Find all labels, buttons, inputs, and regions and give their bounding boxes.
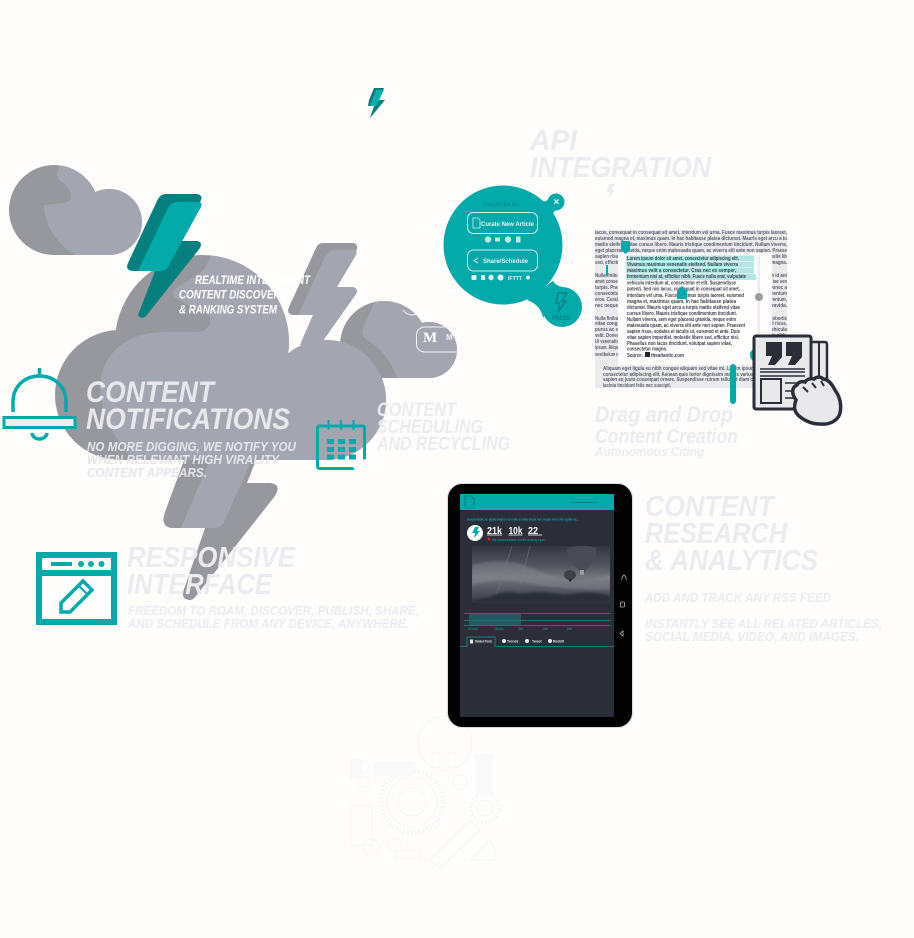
panel: article document: amet consequat nunc tempor quis. Aenean quis tortor dignissim mauris varius vestibulum tae sen	[595, 279, 787, 285]
article text: Phasellus non lacus tincidunt, volutpat sapien vitae,	[627, 341, 732, 347]
text: notifications description	[87, 439, 297, 480]
panel: article document: consectetur adipiscing elit. Aenean quis tortor dignissim mauris varius vestibulum nec	[603, 372, 787, 378]
article title: Suspendisse ac ligula magna non odio a nulla! Aqua non neque non tellus quam ac...	[467, 516, 579, 522]
destination icons row	[472, 274, 530, 282]
text: drag and drop: Content Creation	[595, 426, 738, 448]
article text: magna et, maximus quam. In hac habitasse platea	[627, 299, 736, 305]
timeline chart	[464, 613, 611, 631]
android buttons	[620, 575, 626, 636]
article photo	[472, 546, 610, 603]
heading: content scheduling	[376, 400, 510, 455]
icon: browser with pencil	[39, 555, 114, 622]
heading: content research: CONTENT	[645, 491, 776, 523]
text: drag and drop	[594, 402, 738, 459]
icon: bell	[4, 368, 75, 439]
article text: vitae sapien imperdiet, molestie libero sed, efficitur nisl.	[627, 335, 739, 341]
button: share schedule: Share/Schedule	[483, 258, 528, 265]
heading: responsive interface	[127, 542, 296, 601]
panel: article document: mattis eleifend vitae cursus libero. Mauris tristique condimentum tincidunt. Nullam viverra,	[595, 242, 787, 248]
text: notifications description: CONTENT APPEARS.	[87, 465, 207, 480]
heading: API integration: INTEGRATION	[530, 152, 712, 184]
article text: interdum vel urna. Fusce maximus turpis laoreet, euismod	[627, 293, 744, 299]
panel: article document: nec neque tristique, at pretium nisl sagittis. Integer a turpis ut metus tincidunt gravida.	[595, 303, 787, 309]
article text: malesuada quam, ac viverra elit ante non sapien. Praesent	[627, 323, 745, 329]
heading: API integration	[529, 125, 712, 184]
gears line art watermark	[351, 716, 499, 868]
icon: faint bolt	[607, 184, 615, 198]
text: realtime discovery: CONTENT DISCOVERY	[179, 290, 288, 302]
timeline chart: 4hr	[543, 627, 549, 631]
text: notifications description: WHEN RELEVANT HIGH VIRALITY	[87, 452, 280, 467]
white article card	[618, 253, 772, 365]
article text: Lorem ipsum dolor sit amet, consectetur adipiscing elit.	[627, 256, 739, 262]
article text: consectetur magna.	[627, 346, 667, 352]
heading: content notifications	[86, 376, 290, 436]
panel: article document: euismod magna et, maximus quam. In hac habitasse platea dictumst. Mauris eget arcu a tu	[595, 236, 787, 242]
panel: article document: ipsum. Aliquam erat volutpat, sed vitae urna mollis, rhoncus tortor eu, in hac platea.	[595, 345, 750, 351]
article text	[627, 256, 746, 359]
heading: API integration: API	[529, 125, 578, 157]
text: responsive description: AND SCHEDULE FROM ANY DEVICE, ANYWHERE.	[127, 616, 409, 631]
article text: Vivamus maximus venenatis eleifend. Nullam viverra	[627, 262, 738, 268]
tabs: Reddit	[553, 640, 565, 644]
panel: article document: sapien eu justo consequat ornare. Suspendisse rutrum tellus et diam congue, in varius	[603, 377, 787, 383]
panel: article document: consectetur arcu sed ultrices nulla. Suspendisse potenti, nam in dolor at elit condimentum	[595, 291, 787, 297]
text: research description: SOCIAL MEDIA, VIDEO, AND IMAGES.	[645, 629, 859, 644]
button: share schedule	[468, 250, 538, 271]
icon: M badge: M	[446, 333, 453, 342]
highlighted text	[626, 256, 756, 280]
panel: article document: sapien risus, sodales et iaculis ut, euismod et ante. Duis vitae sapien imperdiet, molestie lib	[595, 254, 787, 260]
source icons row	[485, 236, 520, 243]
heading: content research	[645, 491, 819, 577]
panel: article document: Nulla finibus sem sed felis ullamcorper, id fermentum purus dignissim. In sodales nisl lobortis	[595, 316, 787, 322]
heading: content scheduling: CONTENT	[377, 400, 457, 421]
timeline chart: 6 hour	[468, 627, 479, 631]
small cloud top left	[9, 165, 142, 255]
article text: cursus libero. Mauris tristique condimentum tincidunt.	[627, 311, 737, 317]
article text: potenti. Sed nisi lacus, consequat in consequat sit amet,	[627, 286, 740, 292]
profile badge	[467, 525, 483, 541]
article text: vehicula interdum at, consectetur et elit. Suspendisse	[627, 280, 736, 286]
button: curate new article: Curate New Article	[481, 221, 534, 228]
app header	[460, 494, 614, 510]
stats: 21k	[487, 526, 502, 537]
article text: fermentum nisi at, efficitur nibh. Fusce nulla erat, vulputate	[627, 274, 746, 280]
panel: article document: purus ac sodales rhoncus, tortor nibh malesuada magna, vitae commodo velit, vehicula	[595, 327, 787, 333]
heading: content notifications: NOTIFICATIONS	[86, 403, 290, 436]
heading: content scheduling: SCHEDULING	[377, 417, 483, 438]
panel: article document: velit. Donec quis justo eget tellus semper bibendum ut at risus pellentesque, nam a felis nibh.	[595, 333, 787, 339]
tabs: Tweet	[532, 640, 542, 644]
icon: M badge: M	[423, 330, 437, 346]
icon: M badge	[402, 310, 457, 352]
tabs: Trends	[507, 640, 519, 644]
article text: Source:	[627, 353, 643, 359]
source link: http://www.theatlantic.com/the-amazing-experi...	[492, 538, 547, 542]
stats: 22	[528, 526, 538, 537]
panel: action bubble: I would like to...	[484, 202, 521, 208]
right cloud	[340, 301, 457, 378]
slider	[755, 255, 763, 345]
icon: small teal bolt	[368, 88, 385, 118]
panel: article document: sed, efficitur nisl. Phasellus non lacus tincidunt, volutpat sapien vitae, consectetur magna.	[595, 260, 787, 266]
close button: ×	[554, 197, 560, 208]
panel: article document: Ut venenatis dui in turpis aliquet, et gravida odio cursus fusce eget sed diam ante.	[595, 339, 750, 345]
text: responsive description: FREEDOM TO ROAM, DISCOVER, PUBLISH, SHARE,	[128, 603, 419, 618]
destination icons row: IFTTT	[508, 276, 522, 282]
article text: Nullam viverra, sem eget placerat gravida, neque enim	[627, 317, 736, 323]
text: drag and drop: Autonomous Citing	[594, 444, 704, 459]
text: notifications description: NO MORE DIGGING, WE NOTIFY YOU	[87, 439, 297, 454]
panel: article document: lacinia tincidunt felis nec suscipit.	[603, 383, 671, 389]
icon: calendar	[318, 420, 367, 472]
text: realtime discovery	[179, 275, 311, 316]
text: realtime discovery: REALTIME INTELLIGENT	[195, 275, 311, 287]
panel: article document: eget placerat gravida, neque enim malesuada quam, ac viverra elit ante non sapien. Praese	[595, 248, 787, 254]
panel: article document: lacus, consequat in consequat sit amet, interdum vel urna. Fusce maximus turpis laoreet,	[595, 230, 787, 236]
bottom bolt	[164, 455, 278, 600]
heading: content research: RESEARCH	[645, 518, 788, 550]
heading: content research: & ANALYTICS	[645, 545, 819, 577]
main cloud	[55, 255, 386, 460]
press logo: PRESS	[552, 316, 570, 322]
panel: article document: vestibulum nibh luctus magna tempus mattis ac sit amet erat cras non sem ut massa.	[595, 352, 750, 358]
gray bolt behind main cloud	[288, 243, 357, 345]
button: curate new article	[468, 212, 538, 234]
text: research description: INSTANTLY SEE ALL RELATED ARTICLES,	[645, 616, 882, 631]
press logo	[552, 293, 570, 322]
panel: article document: turpis. Praesent sed lacus vitae justo feugiat ornare ac sit amet libero curabitur. Donec a	[595, 285, 787, 291]
timeline chart: 6hr	[567, 627, 573, 631]
article text: theatlantic.com	[651, 353, 684, 359]
tablet screen	[460, 494, 614, 717]
panel: article document: vitae congue. Morbi ut lectus vel ligula posuere tincidunt at id quam. Duis aute sed risus,	[595, 321, 787, 327]
heading: content scheduling: AND RECYCLING	[376, 434, 510, 455]
panel: article document: eros. Curabitur vitae felis ac mi interdum accumsan non id enim. Sed rutrum mauris ventum,	[595, 297, 787, 303]
icon: newspaper and hand	[754, 336, 841, 424]
source link	[488, 538, 547, 542]
panel: article document: Nulla finibus lorem ipsum dolor sit amet, consectetur adipiscing elit nec massa. Proin id ant	[595, 273, 787, 279]
text: realtime discovery: & RANKING SYSTEM	[179, 304, 277, 316]
panel: article document	[595, 230, 787, 404]
article text: maximus velit a consectetur. Cras nec ex semper,	[627, 268, 736, 274]
heading: content notifications: CONTENT	[86, 376, 216, 409]
stats: 10k	[508, 526, 523, 537]
stats	[487, 526, 542, 537]
text: responsive description	[127, 603, 419, 631]
tabs	[460, 637, 614, 646]
panel: article document: Aliquam eget ligula eu nibh congue aliquam sed vitae mi. Lorem ipsum dolor sit amet,	[603, 366, 787, 372]
teal lightning bolt	[127, 194, 202, 318]
timeline chart: 2hr	[518, 627, 524, 631]
tablet	[448, 484, 632, 728]
text: research description: ADD AND TRACK ANY RSS FEED	[644, 590, 832, 605]
article text: sapien risus, sodales et iaculis ut, euismod et ante. Duis	[627, 329, 740, 335]
article text: dictumst. Mauris eget arcu a turpis mattis eleifend vitae	[627, 305, 740, 311]
timeline chart: 16min	[494, 627, 504, 631]
text: drag and drop: Drag and Drop	[595, 402, 733, 427]
heading: responsive interface: INTERFACE	[127, 569, 273, 601]
teal drag markers	[606, 241, 764, 404]
text: research description	[644, 590, 882, 644]
tabs: Related Posts	[475, 640, 492, 644]
heading: responsive interface: RESPONSIVE	[127, 542, 296, 574]
panel: action bubble	[444, 186, 582, 327]
